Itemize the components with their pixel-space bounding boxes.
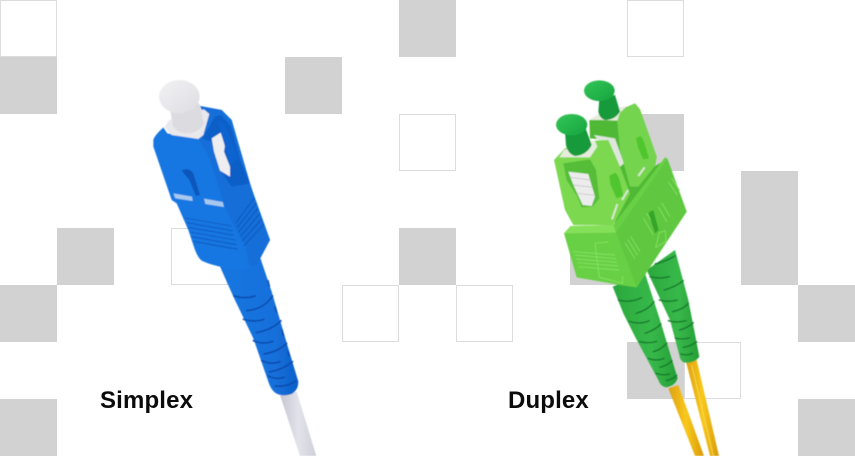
light stripes [173, 193, 193, 201]
green coupling body [564, 157, 687, 287]
green strain relief boots [613, 250, 699, 387]
front green cap [556, 114, 587, 135]
duplex connector photo illustration [554, 80, 719, 456]
ribs, letters and latch [573, 178, 680, 283]
blue connector housing [153, 106, 270, 270]
white cable [280, 392, 316, 456]
grip ridges [185, 198, 264, 249]
label: Simplex: Simplex [100, 387, 194, 414]
latch frame [203, 115, 250, 187]
label: Duplex: Duplex [508, 387, 589, 414]
white collar, plunger and dust cap [159, 80, 209, 139]
front latch housing [554, 127, 630, 225]
simplex connector photo illustration [153, 80, 316, 456]
rear green cap [584, 80, 615, 101]
yellow cables [668, 360, 719, 456]
thumb recess [182, 169, 200, 196]
blue strain relief boot [219, 255, 298, 395]
side face [198, 106, 270, 267]
white latch window [212, 133, 230, 177]
rear latch housing [589, 95, 667, 227]
